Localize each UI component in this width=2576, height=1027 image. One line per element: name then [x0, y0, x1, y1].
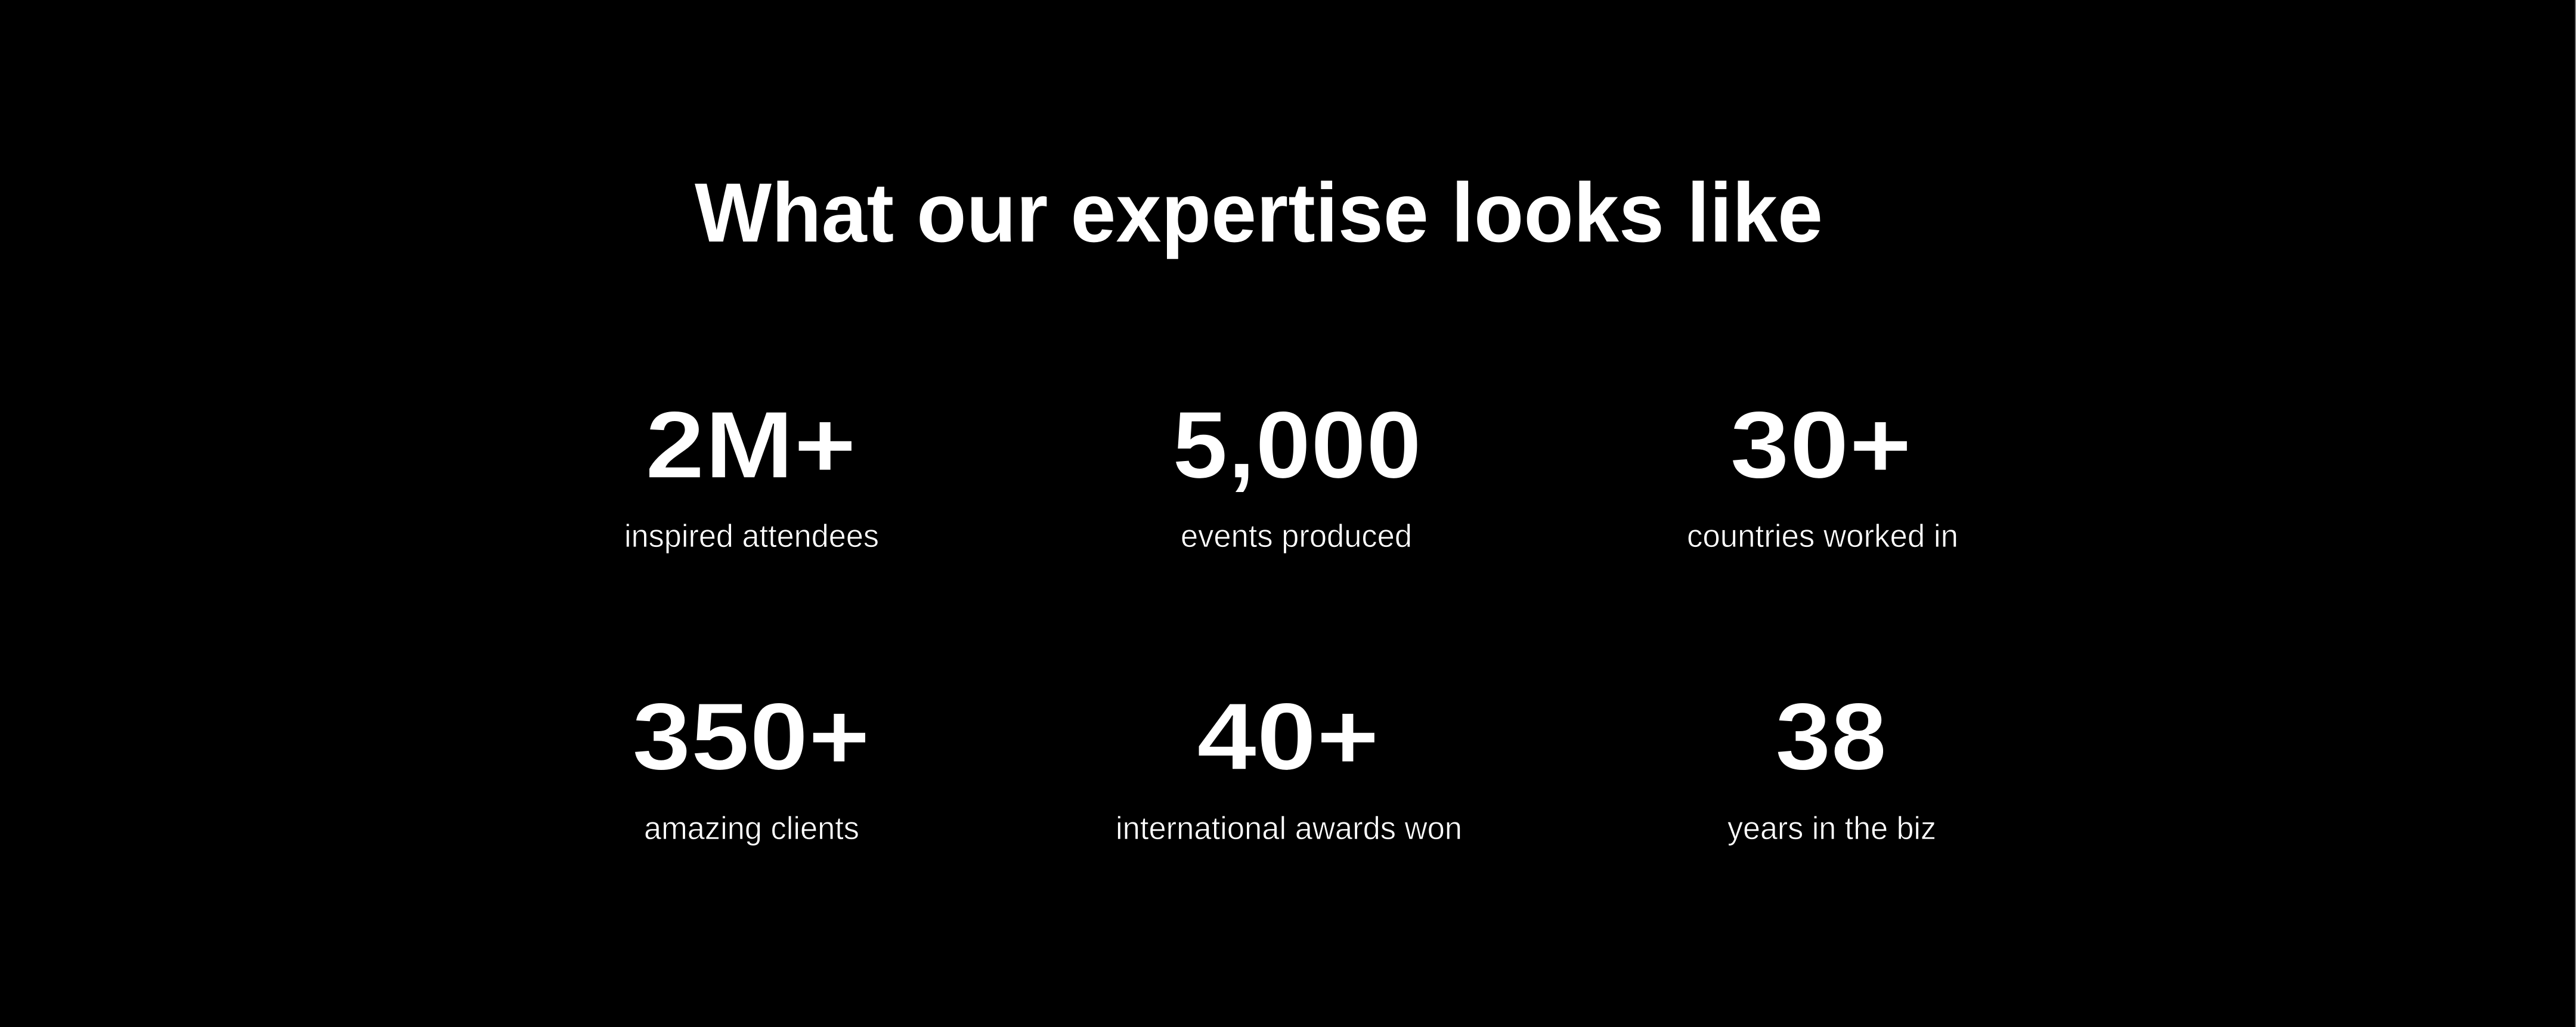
stat: countries worked in: [1687, 391, 1958, 554]
label: international awards won: international awards won: [1116, 811, 1462, 846]
label: amazing clients: amazing clients: [644, 811, 859, 846]
stat: inspired attendees: [624, 391, 879, 554]
number: 30+: 30+: [1730, 391, 1912, 498]
number: 40+: 40+: [1197, 683, 1379, 790]
number: 350+: 350+: [632, 683, 870, 790]
number: 38: 38: [1775, 683, 1887, 790]
title: What our expertise looks like: [695, 165, 1823, 259]
number: 2M+: 2M+: [645, 391, 856, 498]
stat: international awards won: [1116, 683, 1462, 846]
stat: events produced: [1172, 391, 1422, 554]
stat: years in the biz: [1727, 683, 1936, 846]
label: events produced: events produced: [1181, 518, 1412, 554]
label: inspired attendees: inspired attendees: [624, 518, 879, 554]
label: countries worked in: countries worked in: [1687, 518, 1958, 554]
stat: amazing clients: [632, 683, 870, 846]
number: 5,000: 5,000: [1172, 391, 1422, 498]
label: years in the biz: years in the biz: [1727, 811, 1936, 846]
